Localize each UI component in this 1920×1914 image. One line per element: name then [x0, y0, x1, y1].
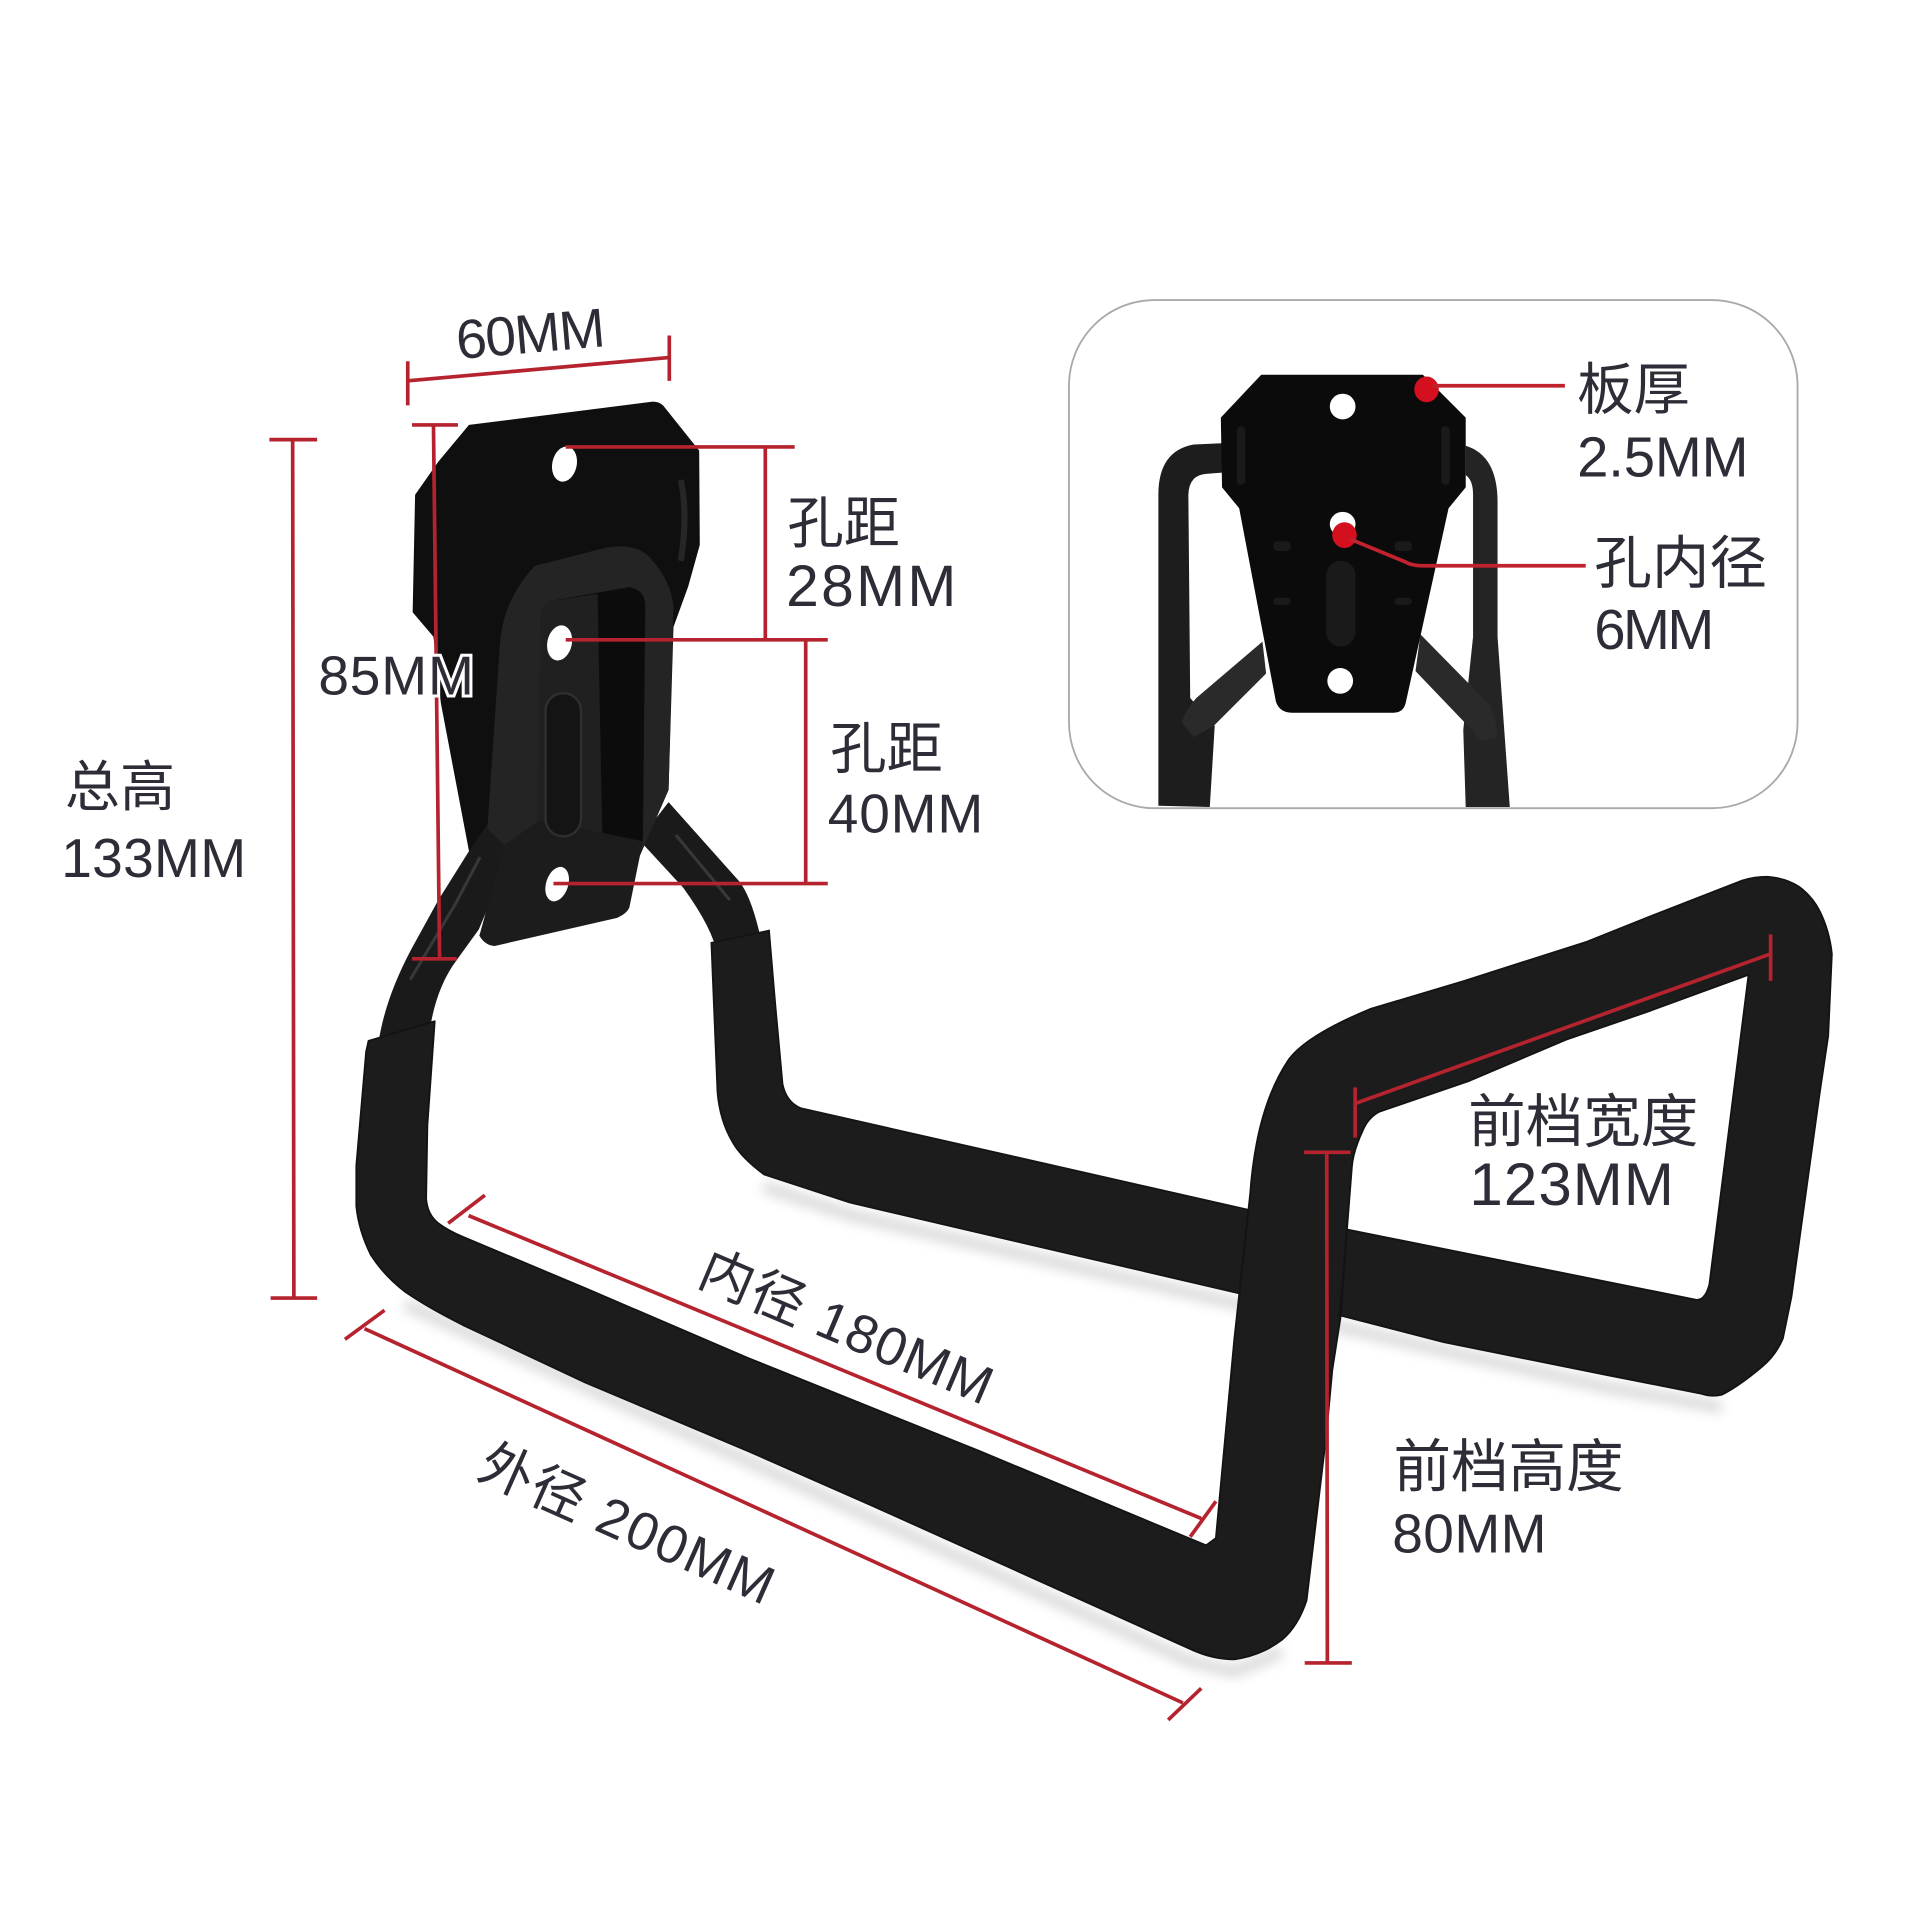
label: hole inner diameter: 孔内径: [1594, 532, 1767, 596]
back plate emboss: [681, 480, 684, 561]
inset hook right frame: [1463, 446, 1510, 807]
dimension: total height 133MM: [61, 440, 317, 1298]
left metal arm: [377, 820, 514, 1053]
right metal arm: [639, 802, 764, 955]
channel recess: [540, 587, 645, 845]
inset plate slot and embossing: [1237, 426, 1450, 647]
label: hole inner diameter: 6MM: [1594, 598, 1714, 661]
dimension: total height 133MM: 总高: [65, 756, 175, 818]
inset frame: [1069, 300, 1798, 808]
dimension: outer diameter 200MM: 外径 200MM: [470, 1433, 783, 1616]
dimension: hole spacing 40MM: [553, 640, 983, 884]
dimension: outer diameter 200MM: [345, 1310, 1201, 1720]
back plate: [413, 402, 700, 857]
dimension: hole spacing 40MM: 40MM: [828, 783, 983, 845]
dimension: plate height 85MM: [318, 425, 474, 959]
foam covered front frame: [356, 877, 1832, 1659]
channel face strip: [538, 594, 602, 845]
label: hole inner diameter: [1594, 532, 1767, 661]
label: plate thickness: 板厚: [1577, 358, 1690, 421]
rear bar and leg: [711, 931, 1254, 1296]
label: plate thickness: [1577, 358, 1749, 488]
slot: [546, 693, 581, 836]
dimension: front height 80MM: 80MM: [1392, 1503, 1547, 1565]
dimension: plate width 60MM: [408, 296, 669, 405]
dimension: hole spacing 28MM: [566, 447, 956, 640]
right arm highlight: [676, 835, 730, 900]
callout: hole diameter marker: [1332, 522, 1586, 566]
dimension: hole spacing 40MM: 孔距: [830, 717, 943, 780]
inset plate holes: [1327, 394, 1356, 694]
panel: rear view inset: [1069, 300, 1798, 808]
dimension: inner diameter 180MM: 内径 180MM: [691, 1239, 1002, 1416]
inset hook left diagonal: [1182, 642, 1266, 737]
callout: plate thickness marker: [1414, 377, 1565, 402]
dimension: total height 133MM: 133MM: [61, 827, 246, 889]
dimension: front height 80MM: [1304, 1152, 1624, 1663]
dimension: front width 123MM: 前档宽度: [1468, 1090, 1698, 1154]
dimension: plate width 60MM: 60MM: [453, 296, 608, 371]
left arm highlight: [410, 857, 480, 980]
channel wall: [487, 546, 673, 857]
inset hook right diagonal: [1416, 634, 1498, 741]
dimension: inner diameter 180MM: [448, 1195, 1216, 1537]
inset mounting plate: [1221, 375, 1466, 713]
dimension: hole spacing 28MM: 孔距: [787, 491, 900, 554]
dimension: hole spacing 28MM: 28MM: [786, 554, 956, 619]
dimension: front width 123MM: [1355, 934, 1771, 1218]
ground shadow: [405, 1187, 1722, 1672]
hook illustration: [356, 402, 1832, 1672]
dimension: plate height 85MM: 85MM: [318, 644, 474, 706]
lower plate: [479, 820, 643, 946]
label: plate thickness: 2.5MM: [1577, 425, 1749, 488]
dimension: front height 80MM: 前档高度: [1393, 1436, 1624, 1500]
dimension: front width 123MM: 123MM: [1469, 1151, 1674, 1218]
inset hook left frame: [1158, 443, 1222, 807]
mounting holes: [541, 444, 580, 904]
